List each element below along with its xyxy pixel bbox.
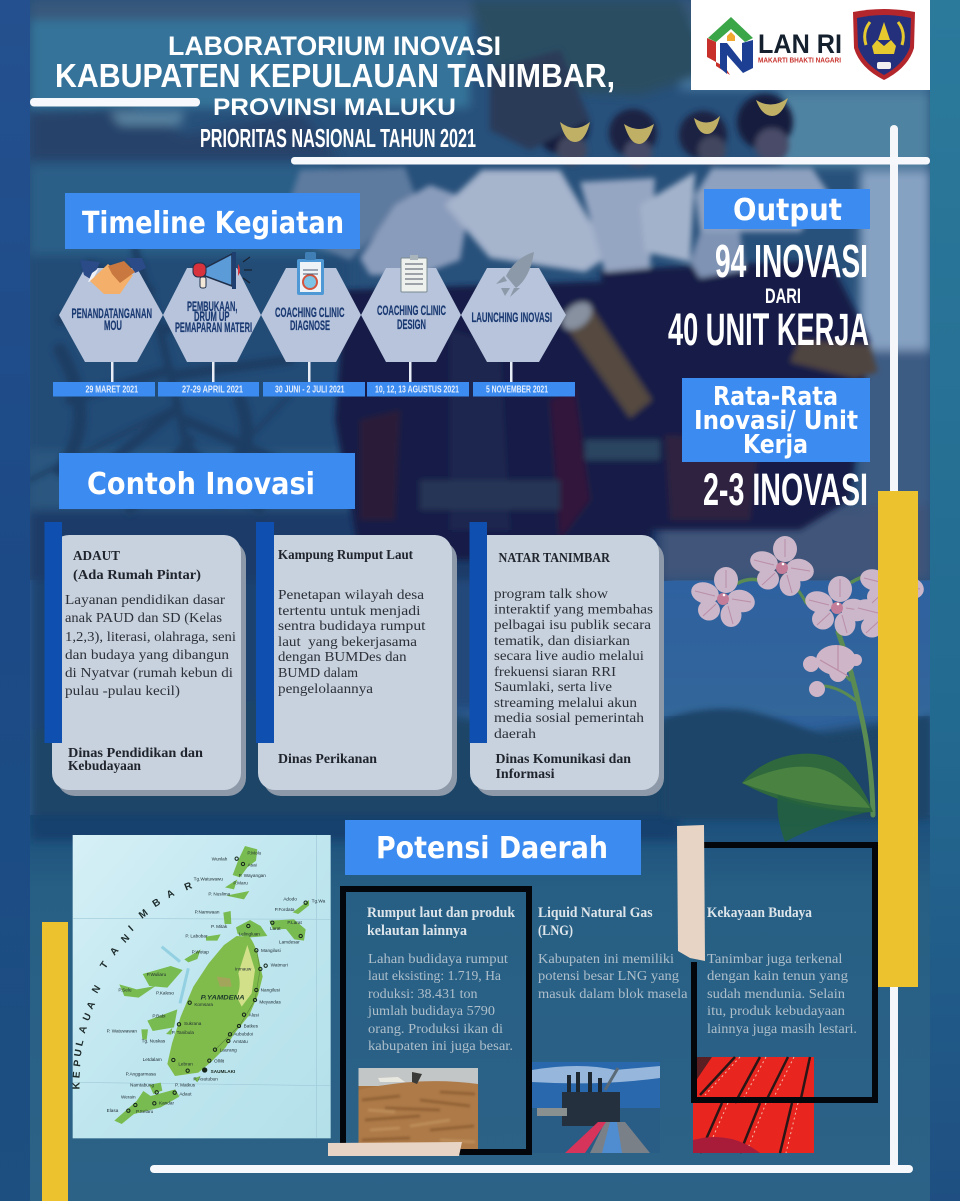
- step 5: [461, 268, 566, 362]
- map archipelago label: KEPULAUAN TANIMBAR: [71, 881, 194, 1089]
- tape: vertical: [677, 825, 705, 961]
- map labels: P.Babi: [152, 1013, 165, 1018]
- map labels: Nangilusi: [261, 988, 280, 993]
- map labels: Adodo: [283, 897, 297, 902]
- icon: clipboard with magnifier: [297, 252, 324, 295]
- date bars: [53, 382, 575, 396]
- text: cultural potential: dengan kain tenun yang: [707, 969, 848, 984]
- step 1: PENANDATANGANAN: [72, 305, 152, 321]
- map labels: P. Labobar: [185, 933, 208, 938]
- logo panel: [691, 0, 930, 90]
- title: PROVINSI MALUKU: [213, 94, 456, 121]
- text: seaweed potential: Rumput laut dan produk: [367, 905, 516, 921]
- text: cultural potential: itu, produk kebudayaan: [707, 1004, 845, 1019]
- left side strip: [0, 0, 30, 1201]
- card: Kampung Rumput Laut: dengan BUMDes dan: [278, 650, 406, 665]
- stat: 94 inovasi dari 40 unit kerja: 94 INOVASI: [715, 235, 868, 287]
- map labels: P. Mitak: [211, 924, 228, 929]
- map labels: Lebran: [178, 1061, 193, 1066]
- map labels: Wunlah: [212, 856, 228, 861]
- map labels: P. Tanibula: [172, 1030, 194, 1035]
- card: ADAUT: Kebudayaan: [68, 759, 141, 774]
- text: seaweed potential: roduksi: 38.431 ton: [368, 987, 478, 1002]
- card: Natar Tanimbar: tematik, dan disiarkan: [494, 634, 630, 649]
- card: ADAUT: [44, 522, 246, 796]
- heading: Timeline Kegiatan: [65, 193, 360, 249]
- map labels: Meyandas: [259, 999, 281, 1004]
- map labels: P. Nuslima: [208, 891, 231, 896]
- orchid decoration: [689, 536, 926, 842]
- map labels: Tg.Watuwawu: [194, 877, 223, 882]
- icon: checklist: [401, 255, 427, 292]
- heading: rata-rata: Inovasi/ Unit: [694, 406, 858, 436]
- map labels: Laurang: [220, 1048, 237, 1053]
- map labels: SAUMLAKI: [211, 1069, 235, 1074]
- panel: output: [668, 189, 870, 515]
- text: seaweed potential: laut eksisting: 1.719, Ha: [368, 969, 502, 984]
- map of Tanimbar islands: [71, 835, 331, 1138]
- photo: LNG platform: [532, 1062, 660, 1153]
- text: LNG potential: potensi besar LNG yang: [538, 969, 679, 984]
- reef marks: [162, 947, 188, 1003]
- map labels: [107, 850, 326, 1114]
- drum: [565, 305, 652, 418]
- map labels: Amtatu: [233, 1039, 248, 1044]
- text: seaweed potential: kelautan lainnya: [367, 923, 468, 939]
- island group: [114, 846, 309, 1124]
- icon: handshake: [80, 258, 146, 294]
- text: cultural potential: sudah mendunia. Selain: [707, 987, 845, 1002]
- white frame line: vertical right: [890, 125, 898, 1170]
- text: seaweed potential: orang. Produksi ikan di: [368, 1022, 503, 1037]
- date bars: 10, 12, 13 AGUSTUS 2021: [375, 384, 459, 396]
- text: cultural potential: [707, 905, 857, 1037]
- map labels: P.Anggarmasa: [126, 1071, 156, 1076]
- map labels: Tg.Wa: [312, 898, 326, 903]
- map labels: P. Wayangan: [239, 873, 266, 878]
- dark skirts: [335, 280, 660, 560]
- hair and faces: [535, 100, 589, 154]
- logo text: LAN RI: [758, 29, 842, 59]
- text: cultural potential: Tanimbar juga terkenal: [707, 952, 843, 967]
- frame: right black frame: [694, 845, 875, 1100]
- text: seaweed potential: Lahan budidaya rumput: [368, 952, 508, 967]
- date bars: 27-29 APRIL 2021: [182, 384, 243, 396]
- card: Natar Tanimbar: frekuensi siaran RRI: [494, 665, 616, 680]
- step 2: PEMAPARAN MATERI: [175, 319, 252, 335]
- text: LNG potential: Liquid Natural Gas: [538, 905, 653, 921]
- heading: rata-rata: [682, 378, 870, 462]
- card: ADAUT: (Ada Rumah Pintar): [73, 568, 201, 583]
- map labels: P.Maru: [233, 881, 248, 886]
- map labels: Mangilusi: [261, 948, 281, 953]
- card: Natar Tanimbar: Informasi: [496, 767, 555, 782]
- white line under title left: [30, 98, 200, 106]
- step 2: DRUM UP: [194, 308, 230, 324]
- step 4: [361, 268, 461, 362]
- map labels: P.Selu: [118, 988, 132, 993]
- map labels: Watmuri: [271, 963, 288, 968]
- step 4: COACHING CLINIC: [377, 302, 446, 318]
- stat: 94 inovasi dari 40 unit kerja: [668, 235, 869, 355]
- map labels: P.Kaleso: [156, 990, 174, 995]
- timeline: [53, 252, 575, 396]
- text: seaweed potential: [367, 905, 516, 1054]
- map labels: P. Matkus: [175, 1083, 196, 1088]
- map labels: Elasa: [107, 1108, 119, 1113]
- map labels: Inmauw: [235, 967, 252, 972]
- yellow bar right: [878, 491, 918, 987]
- heading: Contoh Inovasi: [59, 453, 355, 509]
- card: Natar Tanimbar: Dinas Komunikasi dan: [496, 752, 631, 767]
- card: Kampung Rumput Laut: sentra budidaya rumput: [278, 619, 426, 634]
- card: Natar Tanimbar: Saumlaki, serta live: [494, 680, 612, 695]
- logo text: MAKARTI BHAKTI NAGARI: [758, 58, 841, 64]
- icon: LAN logo: [707, 17, 753, 75]
- arm and second drum: [790, 340, 878, 378]
- map labels: Batkes: [244, 1024, 259, 1029]
- map labels: P.Fordata: [275, 907, 295, 912]
- step 3: COACHING CLINIC: [275, 304, 344, 320]
- heading: rata-rata: Rata-Rata: [713, 382, 838, 412]
- step 4: DESIGN: [397, 316, 426, 332]
- woven skirt patches: [450, 330, 510, 530]
- palm fronds: [30, 250, 300, 510]
- island: Yamdena: [167, 936, 263, 1076]
- map labels: P.Molu: [247, 850, 262, 855]
- map labels: Namtabung: [130, 1083, 154, 1088]
- heading: output: Output: [733, 193, 842, 228]
- step 2: PEMBUKAAN,: [187, 298, 238, 314]
- text: LNG potential: masuk dalam blok masela: [538, 987, 688, 1002]
- card: Natar Tanimbar: secara live audio melalui: [494, 649, 644, 664]
- card: ADAUT: Layanan pendidikan dasar: [65, 593, 225, 608]
- white line bottom: [150, 1165, 913, 1173]
- map labels: P. Watuwawan: [107, 1029, 137, 1034]
- card: Kampung Rumput Laut: Kampung Rumput Laut: [278, 548, 413, 563]
- step 3: [261, 268, 361, 362]
- heading: rata-rata: Kerja: [743, 430, 808, 460]
- card: ADAUT: di Nyatvar (rumah kebun di: [65, 666, 233, 681]
- card: Natar Tanimbar: [470, 522, 664, 796]
- right side strip: [930, 0, 960, 1201]
- map labels: Tg. Nuskas: [142, 1039, 166, 1044]
- tape: horizontal: [328, 1142, 462, 1156]
- headdresses: [560, 98, 788, 144]
- title: LABORATORIUM INOVASI: [168, 31, 501, 61]
- card: Kampung Rumput Laut: Dinas Perikanan: [278, 752, 377, 767]
- card: ADAUT: dan budaya yang dibangun: [65, 648, 229, 663]
- step 2: [163, 268, 261, 362]
- map labels: Werain: [121, 1095, 136, 1100]
- step 3: DIAGNOSE: [290, 317, 330, 333]
- card: Kampung Rumput Laut: [256, 522, 457, 796]
- card: ADAUT: 1,2,3), literasi, olahraga, seni: [65, 630, 236, 645]
- card: Kampung Rumput Laut: tertentu untuk menjadi: [278, 604, 421, 619]
- photo: woven fabric: [693, 1057, 814, 1153]
- map labels: Kandar: [159, 1100, 174, 1105]
- map labels: Alusi: [249, 1013, 259, 1018]
- map labels: Komsara: [194, 1002, 213, 1007]
- map labels: P.Larat: [287, 920, 302, 925]
- text: LNG potential: [538, 905, 688, 1002]
- heading: Potensi Daerah: [345, 820, 641, 875]
- icon: rocket: [496, 252, 534, 297]
- card: Natar Tanimbar: daerah: [494, 727, 536, 742]
- title: KABUPATEN KEPULAUAN TANIMBAR,: [55, 57, 615, 94]
- card: Natar Tanimbar: streaming melalui akun: [494, 696, 637, 711]
- text: seaweed potential: jumlah budidaya 5790: [367, 1004, 495, 1019]
- card: ADAUT: ADAUT: [73, 549, 121, 564]
- card: Natar Tanimbar: pelbagai isu publik secara: [494, 618, 652, 633]
- title: [55, 31, 615, 153]
- sky crisp: [664, 581, 930, 716]
- heading: Contoh Inovasi: Contoh Inovasi: [87, 467, 315, 502]
- date bars: 30 JUNI - 2 JULI 2021: [275, 384, 345, 396]
- stat: 94 inovasi dari 40 unit kerja: DARI: [765, 285, 801, 308]
- heading: Potensi Daerah: Potensi Daerah: [376, 831, 608, 866]
- step 1: MOU: [104, 317, 122, 333]
- card: Natar Tanimbar: interaktif yang membahas: [494, 602, 653, 618]
- step 1: [59, 268, 163, 362]
- icon: megaphone: [193, 252, 252, 289]
- text: cultural potential: Kekayaan Budaya: [707, 905, 813, 921]
- map labels: P.Namwaan: [195, 910, 220, 915]
- title: PRIORITAS NASIONAL TAHUN 2021: [200, 123, 476, 153]
- card: Natar Tanimbar: media sosial pemerintah: [494, 711, 644, 726]
- map labels: P. Asutubun: [193, 1077, 218, 1082]
- white line under title right: [291, 157, 930, 164]
- card: ADAUT: anak PAUD dan SD (Kelas: [65, 611, 222, 626]
- heading: Timeline Kegiatan: Timeline Kegiatan: [82, 206, 344, 241]
- card: Natar Tanimbar: program talk show: [494, 587, 609, 602]
- text: seaweed potential: kabupaten ini juga besar.: [368, 1039, 513, 1054]
- white shirts: [290, 167, 415, 260]
- frame: left black frame: [343, 889, 529, 1152]
- card: Kampung Rumput Laut: BUMD dalam: [278, 666, 358, 681]
- map labels: Larat: [270, 926, 281, 931]
- map labels: Adaut: [179, 1092, 192, 1097]
- heading: output: [704, 189, 870, 229]
- card: Kampung Rumput Laut: Penetapan wilayah desa: [278, 588, 425, 603]
- map labels: P.Selaru: [136, 1109, 154, 1114]
- map labels: Lelingluan: [239, 932, 260, 937]
- card: ADAUT: pulau -pulau kecil): [65, 684, 180, 699]
- photo: seaweed harvest: [358, 1068, 478, 1150]
- map labels: P.Wuliaru: [147, 972, 167, 977]
- town markers: [127, 857, 307, 1112]
- card: Natar Tanimbar: NATAR TANIMBAR: [498, 551, 611, 566]
- map labels: Asai: [248, 862, 257, 867]
- date bars: 5 NOVEMBER 2021: [486, 384, 548, 396]
- map labels: P.Wotap: [192, 949, 209, 954]
- step 5: LAUNCHING INOVASI: [472, 309, 552, 325]
- stat: 2-3 inovasi: 2-3 INOVASI: [703, 464, 868, 515]
- map labels: Aububdoi: [233, 1032, 253, 1037]
- map labels: P.YAMDENA: [201, 994, 245, 1001]
- text: LNG potential: (LNG): [538, 923, 573, 939]
- map labels: Lamdesar: [279, 939, 300, 944]
- map labels: Ollilit: [214, 1058, 225, 1063]
- map labels: Letdalam: [143, 1057, 162, 1062]
- text: LNG potential: Kabupaten ini memiliki: [538, 952, 674, 967]
- card: ADAUT: Dinas Pendidikan dan: [68, 746, 203, 761]
- map labels: Sukrana: [184, 1021, 202, 1026]
- stems: [111, 361, 512, 383]
- card: Kampung Rumput Laut: pengelolaannya: [278, 682, 374, 697]
- text: cultural potential: lainnya juga masih lestari.: [707, 1022, 857, 1037]
- date bars: 29 MARET 2021: [86, 384, 138, 396]
- yellow bar left: [42, 922, 68, 1201]
- icon: regency emblem: [853, 9, 915, 80]
- card: Kampung Rumput Laut: laut yang bekerjasama: [278, 635, 418, 650]
